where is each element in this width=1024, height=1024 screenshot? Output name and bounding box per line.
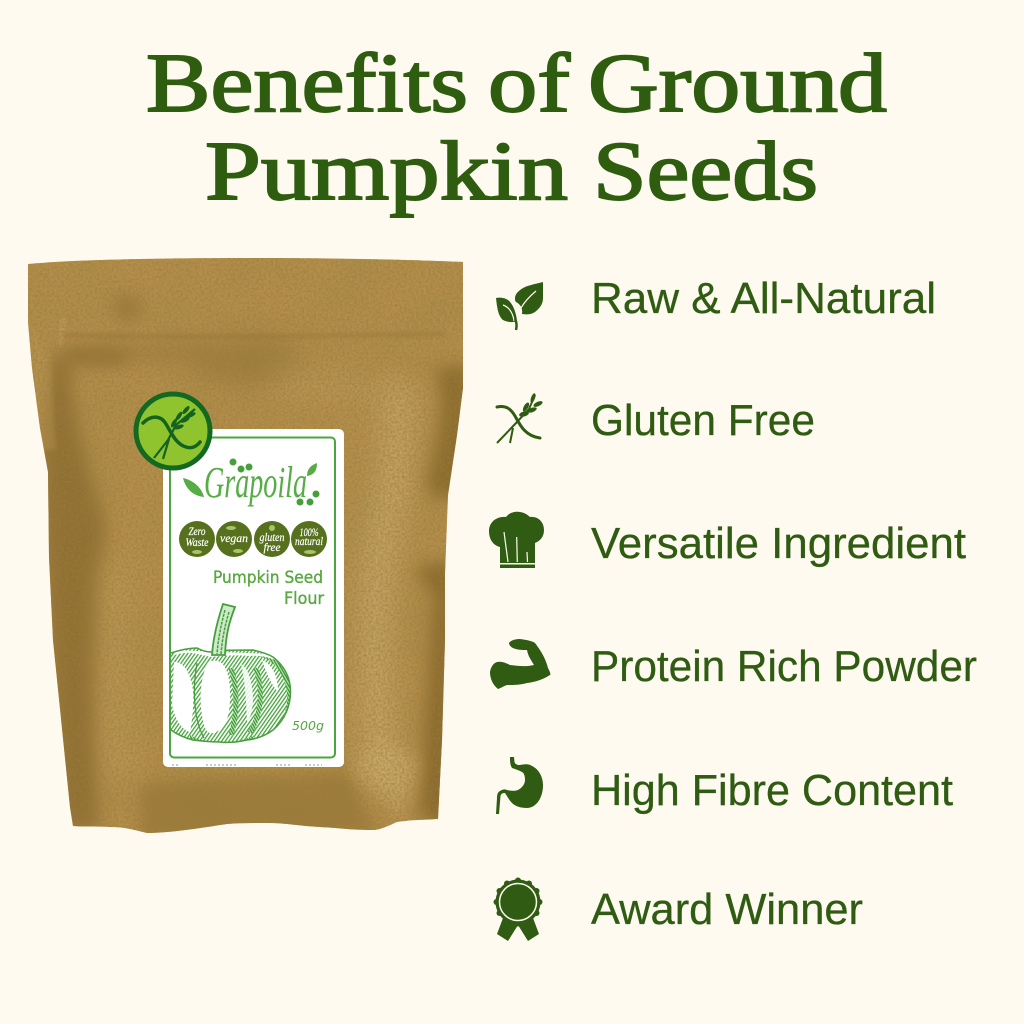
benefit: protein rich powder: Protein Rich Powder xyxy=(591,642,977,691)
certification badges xyxy=(179,521,327,557)
icon: chef hat xyxy=(489,512,544,568)
benefit: high fibre content: High Fibre Content xyxy=(591,766,953,815)
title: Ground xyxy=(588,37,887,130)
brand logo: Grapoila xyxy=(204,458,307,507)
benefit: raw & all-natural: Raw & All-Natural xyxy=(591,274,936,323)
right folds xyxy=(426,365,470,500)
weight: 500g xyxy=(292,718,324,733)
certification badges: free xyxy=(264,540,281,554)
product name xyxy=(213,568,324,609)
icon: flexed arm xyxy=(490,639,550,689)
benefit: versatile ingredient: Versatile Ingredient xyxy=(591,519,966,568)
icon: stomach xyxy=(496,757,543,814)
product name: Flour xyxy=(284,589,324,609)
bottom gusset shadow xyxy=(140,770,378,840)
title xyxy=(146,37,887,218)
icon: rosette xyxy=(494,878,542,941)
benefit: award winner: Award Winner xyxy=(591,885,863,934)
benefit: award winner xyxy=(494,878,863,941)
benefit: gluten free xyxy=(497,393,815,445)
certification badges: natural xyxy=(295,534,324,548)
certification badges: Zero xyxy=(188,524,206,538)
product name: Pumpkin Seed xyxy=(213,568,323,588)
certification badges: Waste xyxy=(186,535,209,549)
title: Benefits xyxy=(146,37,468,130)
icon: leaves xyxy=(496,282,543,330)
title: Seeds xyxy=(593,125,818,218)
label xyxy=(163,429,344,767)
title: of xyxy=(488,37,570,130)
benefit: versatile ingredient xyxy=(489,512,966,568)
mid left light xyxy=(102,606,106,611)
product: kraft pouch xyxy=(20,250,470,840)
benefit: gluten free: Gluten Free xyxy=(591,396,815,445)
certification badges: vegan xyxy=(220,531,248,545)
certification badges: 100% xyxy=(300,525,318,539)
seal crease and creases xyxy=(60,334,445,337)
benefit: high fibre content xyxy=(496,757,953,815)
brand logo xyxy=(183,458,320,507)
certification badges: gluten xyxy=(260,530,284,544)
benefit: raw & all-natural xyxy=(496,274,936,330)
pumpkin illustration xyxy=(171,602,292,744)
icon: crossed wheat xyxy=(497,393,543,443)
title: Pumpkin xyxy=(205,125,568,218)
gluten free badge xyxy=(136,394,210,468)
left fold shadow xyxy=(40,357,106,830)
